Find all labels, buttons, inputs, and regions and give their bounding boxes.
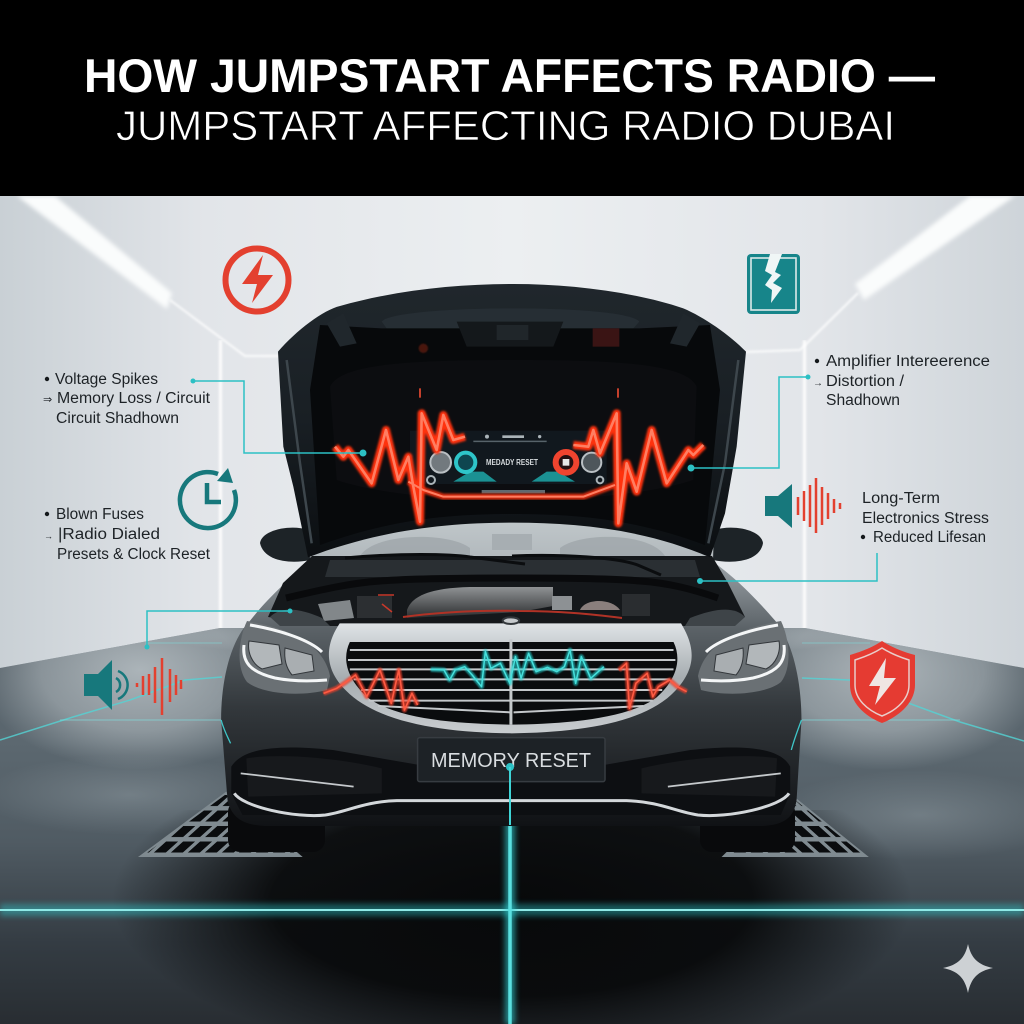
text: blown fuses: Presets & Clock Reset bbox=[57, 546, 211, 563]
text: blown fuses: |Radio Dialed bbox=[58, 526, 160, 543]
text: blown fuses: Blown Fuses bbox=[56, 506, 144, 523]
icon: speaker right bbox=[765, 478, 840, 533]
text: voltage spikes: Circuit Shadhown bbox=[56, 410, 179, 427]
text: amplifier interference: Distortion / bbox=[826, 373, 905, 390]
grille waves bbox=[323, 650, 687, 710]
open hood bbox=[278, 284, 746, 557]
connector dots bbox=[144, 374, 810, 771]
floor light lines bbox=[0, 643, 1024, 1024]
radio screen bbox=[410, 431, 607, 493]
hood outer panel bbox=[278, 284, 746, 557]
text: blown fuses: → bbox=[44, 531, 53, 541]
floor bbox=[0, 628, 1024, 1024]
text: long-term stress: Long-Term bbox=[862, 490, 940, 507]
grille surround bbox=[329, 623, 692, 733]
memory reset label: MEMORY RESET bbox=[431, 750, 591, 772]
header band bbox=[0, 0, 1024, 196]
text: long-term stress: Electronics Stress bbox=[862, 510, 989, 527]
windshield and interior bbox=[310, 515, 715, 563]
text: amplifier interference: Shadhown bbox=[826, 392, 900, 409]
text: voltage spikes bbox=[43, 371, 211, 427]
grille emblem bbox=[503, 617, 519, 624]
icon: speaker left bbox=[84, 658, 181, 715]
radio screen text: MEDADY RESET bbox=[486, 458, 538, 467]
text: voltage spikes: Memory Loss / Circuit bbox=[57, 390, 211, 407]
text: blown fuses bbox=[44, 506, 211, 563]
text: long-term stress bbox=[861, 490, 989, 546]
floor grates bbox=[141, 793, 866, 856]
engine bay bbox=[268, 554, 745, 626]
icon: clock reset bbox=[180, 468, 236, 528]
connector from reset plate bbox=[509, 767, 511, 825]
title: HOW JUMPSTART AFFECTS RADIO — bbox=[84, 50, 935, 103]
icon: red lightning circle bbox=[226, 248, 288, 312]
car body bbox=[221, 563, 801, 826]
title bbox=[84, 50, 935, 149]
memory reset plate shape bbox=[418, 738, 605, 782]
text: voltage spikes: Voltage Spikes bbox=[55, 371, 158, 388]
title: JUMPSTART AFFECTING RADIO DUBAI bbox=[116, 102, 895, 149]
connector lines bbox=[147, 377, 877, 647]
teal wheel arch accents bbox=[221, 720, 801, 750]
lower air intake bbox=[231, 747, 790, 816]
bumper and grille bbox=[221, 617, 801, 816]
left headlight bbox=[239, 621, 330, 694]
room background bbox=[0, 196, 1024, 676]
right headlight bbox=[698, 621, 789, 694]
text: long-term stress: Reduced Lifesan bbox=[873, 529, 986, 546]
text: amplifier interference: Amplifier Intereerence bbox=[826, 353, 990, 370]
text: amplifier interference bbox=[813, 353, 990, 409]
text: amplifier interference: → bbox=[813, 378, 823, 389]
icon: teal battery bolt bbox=[747, 254, 800, 314]
tires bbox=[228, 800, 795, 852]
icon: sparkle watermark bbox=[943, 944, 993, 993]
red voltage wave bbox=[335, 413, 703, 523]
icon: red shield bbox=[850, 641, 915, 723]
text: voltage spikes: ⇒ bbox=[43, 394, 52, 406]
car front bbox=[221, 554, 801, 826]
mirrors bbox=[260, 528, 763, 562]
grille bbox=[346, 639, 677, 725]
grille waves and plate bbox=[323, 650, 687, 782]
hood inner panel bbox=[310, 325, 720, 545]
hood rim highlight bbox=[287, 360, 738, 543]
